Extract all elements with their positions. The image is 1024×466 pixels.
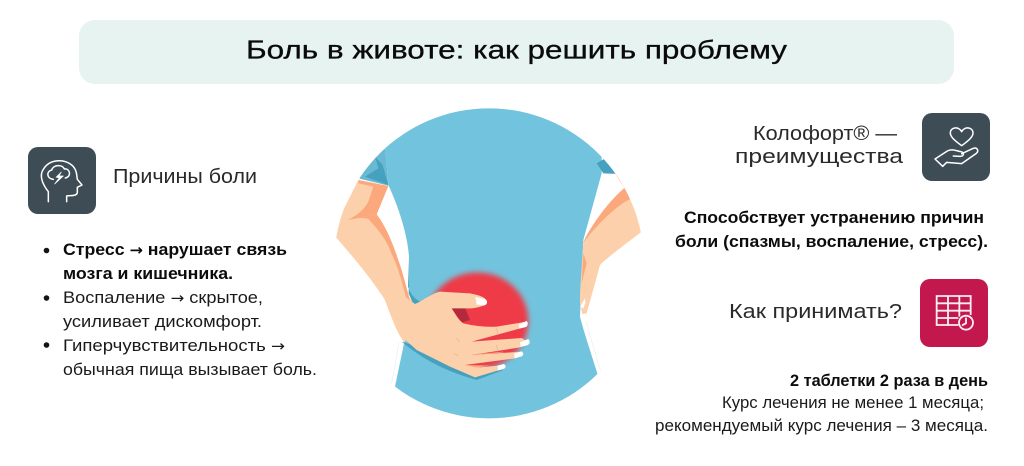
icon: head with stress cloud xyxy=(28,147,96,214)
heading: causes: Причины боли xyxy=(113,166,257,188)
hand xyxy=(385,292,530,377)
causes list: мозга и кишечника. xyxy=(63,264,233,283)
causes list: Стресс → нарушает связь xyxy=(63,240,287,259)
dosage text: Курс лечения не менее 1 месяца; xyxy=(722,393,984,412)
dosage text: рекомендуемый курс лечения – 3 месяца. xyxy=(655,416,988,435)
causes list: Гиперчувствительность → xyxy=(63,336,285,355)
left arm xyxy=(336,180,412,342)
heading: Colofort advantages xyxy=(735,123,904,168)
title banner xyxy=(79,20,954,84)
causes list: обычная пища вызывает боль. xyxy=(63,360,317,379)
causes list: усиливает дискомфорт. xyxy=(63,312,262,331)
advantages text: боли (спазмы, воспаление, стресс). xyxy=(675,232,988,251)
illustration: abdominal pain xyxy=(336,108,641,418)
advantages text xyxy=(675,208,988,251)
dosage text: 2 таблетки 2 раза в день xyxy=(790,371,988,390)
heading: Colofort advantages: преимущества xyxy=(735,146,904,168)
right arm xyxy=(580,174,641,314)
causes list xyxy=(44,240,317,379)
pain glow xyxy=(426,272,528,369)
heading: how to take: Как принимать? xyxy=(729,301,902,323)
causes list: Воспаление → скрытое, xyxy=(63,288,263,307)
icon: heart in hand xyxy=(922,113,990,181)
heading: Colofort advantages: Колофорт® — xyxy=(753,123,897,145)
title banner: Боль в животе: как решить проблему xyxy=(246,34,787,64)
shirt xyxy=(358,100,620,433)
advantages text: Способствует устранению причин xyxy=(684,208,984,227)
dosage text xyxy=(655,371,988,435)
icon: schedule calendar xyxy=(920,279,988,347)
